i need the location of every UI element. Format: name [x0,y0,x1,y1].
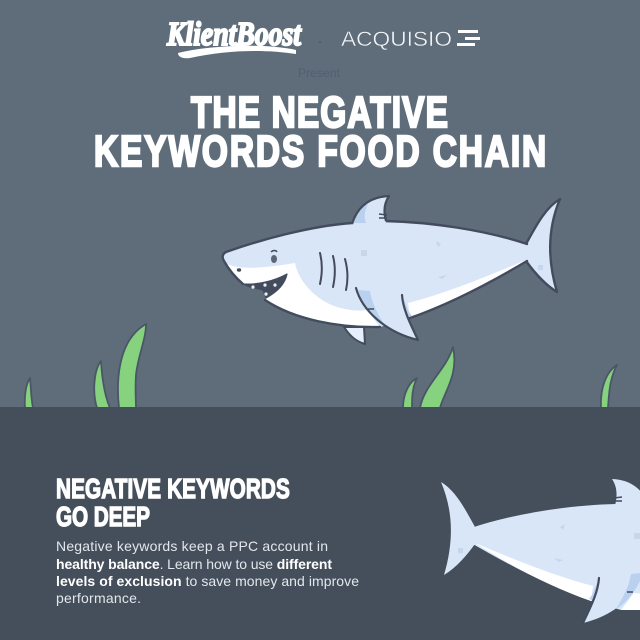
background: upper ocean panel [0,0,640,407]
lower shark tail [441,482,475,575]
logo: Acquisio: ACQUISIO [341,28,452,51]
logo: KlientBoost: KlientBoost [166,16,302,53]
shark gills [320,253,347,290]
shark nostril [237,268,241,272]
body paragraph [56,538,359,606]
body paragraph: healthy balance. Learn how to use different [56,556,332,572]
title: KEYWORDS FOOD CHAIN [94,128,546,176]
lower shark dorsal fin [612,479,640,507]
shark body fill [223,221,530,327]
lower shark pectoral fin [583,571,640,623]
heading: negative keywords go deep: GO DEEP [56,502,150,533]
shark pectoral fin [356,288,418,340]
shark dorsal fin [352,196,389,224]
heading: negative keywords go deep: NEGATIVE KEYWORDS [56,474,290,505]
body paragraph: Negative keywords keep a PPC account in [56,538,328,554]
lower shark skin spots [458,524,640,562]
lower shark body [471,504,640,610]
shark belly fin [344,327,365,344]
body paragraph: levels of exclusion to save money and improve [56,573,359,589]
body paragraph: performance. [56,590,141,606]
title [94,89,546,176]
illustration: shark, lower cropped and mirrored [441,479,640,623]
shark eye [271,250,277,263]
lower dark panel [0,407,640,640]
separator dot [319,41,321,43]
title: THE NEGATIVE [191,89,448,137]
heading: negative keywords go deep [56,474,290,533]
shark white belly [227,263,380,327]
shark tail [526,199,560,292]
shark mouth [243,274,287,298]
shark skin spots [361,241,543,279]
text: Present: Present [298,66,341,80]
seaweed group [25,324,617,408]
lower shark white belly [475,543,593,601]
shark outline [223,221,527,327]
illustration: shark [223,196,560,344]
